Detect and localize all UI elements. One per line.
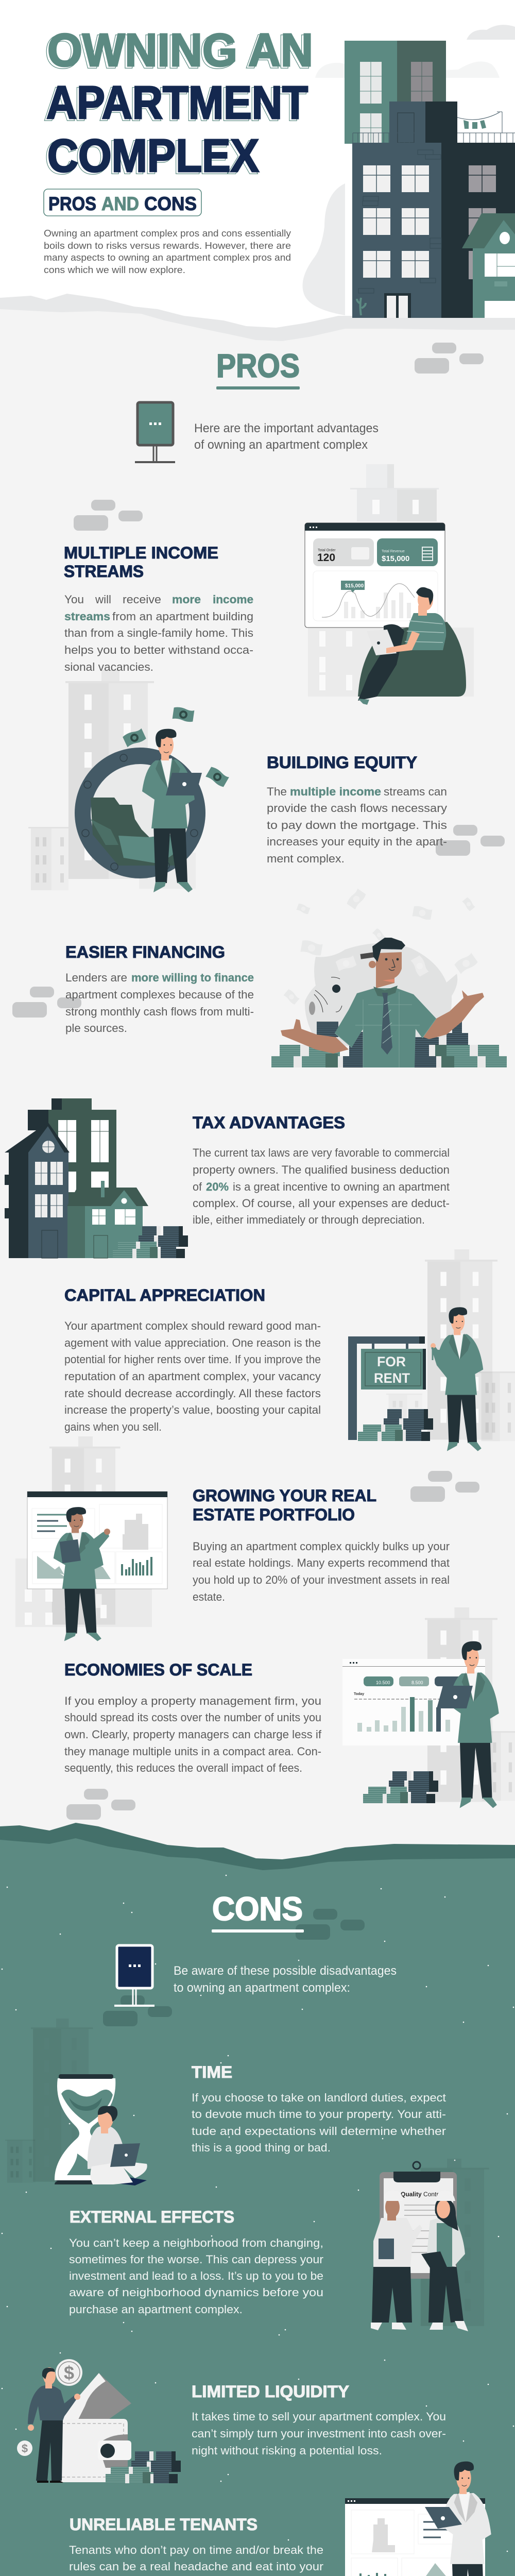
subtitle badge: pros and cons: CONS [144, 193, 197, 214]
con 3 text [192, 2410, 446, 2457]
pro 5 text: rate should decrease accordingly. All these factors [64, 1387, 321, 1400]
cons intro text [174, 1964, 397, 1995]
illustration: man and vault with cash [28, 670, 230, 892]
pro 3 text [65, 971, 254, 1035]
pro 2 text: ment complex. [267, 852, 345, 865]
pro 5 text: potential for higher rents over time. If you improve the [64, 1353, 321, 1366]
intro text [44, 228, 291, 275]
pro 5 text: increase the property’s value, boosting your capital [64, 1403, 321, 1416]
pros intro text: of owning an apartment complex [194, 438, 368, 452]
illustration: quality control clipboard with two workers: Quality Control [401, 2191, 443, 2198]
title: OWNING AN [47, 25, 313, 76]
illustration: man with analytics dashboard: Today [354, 1692, 364, 1696]
hero illustration: apartment buildings [345, 41, 515, 318]
cons intro text: Be aware of these possible disadvantages [174, 1964, 397, 1978]
pro 3 text: strong monthly cash flows from multi- [65, 1005, 254, 1018]
decorative bricks [12, 987, 81, 1018]
decorative bricks [296, 1909, 365, 1940]
illustration: man with wallet, card, coins and cash [17, 2359, 181, 2483]
icon: sign board [114, 1945, 154, 2007]
heading: pros: PROS [216, 347, 300, 384]
pros intro text: Here are the important advantages [194, 421, 379, 435]
subtitle badge: pros and cons: PROS [48, 193, 96, 214]
pro 1 text: helps you to better withstand occa- [64, 643, 253, 656]
heading: cons: CONS [212, 1890, 303, 1927]
decorative bricks [103, 1995, 172, 2026]
subtitle badge: pros and cons: AND [101, 193, 139, 214]
pro 6 text: estate. [193, 1590, 225, 1603]
pro 1 text: You [64, 593, 84, 606]
pros intro text [194, 421, 379, 452]
illustration: for rent sign and man with keys: FOR [377, 1354, 406, 1369]
con 3 heading: limited liquidity: LIMITED LIQUIDITY [192, 2382, 349, 2401]
pro 6 text: real estate holdings. Many experts recommend that [193, 1556, 450, 1569]
con 1 text [192, 2091, 446, 2154]
con 1 text: this is a good thing or bad. [192, 2141, 331, 2154]
con 2 text: aware of neighborhood dynamics before you [69, 2286, 323, 2299]
illustration: houses and apartment building with cash [5, 1098, 188, 1258]
decorative bricks [410, 1471, 479, 1502]
pro 1 heading: multiple income streams: MULTIPLE INCOME [64, 544, 218, 562]
illustration: income dashboard and man on beanbag: $15,000 [382, 554, 409, 563]
con 4 text: Tenants who don’t pay on time and/or break the [69, 2544, 323, 2556]
pro 6 text: Buying an apartment complex quickly bulks up your [193, 1540, 450, 1553]
pro 7 text: should spread its costs over the number of units you [64, 1711, 321, 1724]
pro 6 heading: growing your real estate portfolio: GROWING YOUR REAL [193, 1486, 376, 1505]
pro 4 text: The current tax laws are very favorable to commercial [193, 1146, 450, 1159]
pro 7 text: If you employ a property management firm, you [64, 1694, 321, 1707]
decorative bricks [74, 500, 143, 531]
decorative bricks [66, 1789, 135, 1820]
con 1 text: to devote much time to your property. Your atti- [192, 2108, 446, 2121]
illustration: quality control clipboard with two workers [371, 2159, 489, 2331]
pro 1 text: income [213, 593, 253, 606]
decorative bricks top right [415, 343, 484, 374]
pro 6 heading: growing your real estate portfolio [193, 1486, 376, 1524]
pro 5 text: Your apartment complex should reward good man- [64, 1319, 321, 1332]
pro 6 text [193, 1540, 450, 1603]
pro 5 heading: capital appreciation: CAPITAL APPRECIATION [64, 1286, 265, 1304]
title: APARTMENT [44, 79, 306, 130]
pro 4 text [193, 1146, 450, 1226]
con 1 text: If you choose to take on landlord duties, expect [192, 2091, 446, 2104]
con 2 text: purchase an apartment complex. [69, 2303, 243, 2316]
pro 4 text: property owners. The qualified business deduction [193, 1163, 450, 1176]
pro 2 text: to pay down the mortgage. This [267, 819, 447, 832]
pro 6 heading: growing your real estate portfolio: ESTATE PORTFOLIO [193, 1505, 355, 1524]
pro 5 text: gains when you sell. [64, 1420, 162, 1433]
pro 1 text: than from a single-family home. This [64, 626, 253, 639]
pro 5 text: reputation of an apartment complex, your vacancy [64, 1370, 321, 1383]
pro 5 text [64, 1319, 321, 1433]
illustration: man presenting real estate dashboard [15, 1436, 167, 1641]
pro 2 text: multiple income [290, 785, 381, 798]
illustration: income dashboard and man on beanbag: $15,000 [345, 583, 364, 589]
pro 1 text: streams [64, 610, 110, 623]
title: COMPLEX [45, 132, 257, 183]
pro 3 text: ple sources. [65, 1022, 127, 1035]
con 4 text [69, 2544, 323, 2576]
pro 7 text: they manage multiple units in a compact area. Con- [64, 1745, 321, 1758]
pro 4 text: complex. Of course, all your expenses are deduct- [193, 1197, 450, 1210]
illustration: man with analytics dashboard: 8.500 [411, 1680, 423, 1685]
pro 5 text: agement with value appreciation. One reason is the [64, 1336, 321, 1349]
pro 4 text: ible, either immediately or through depreciation. [193, 1213, 425, 1226]
illustration: man with piggy bank and cash [271, 888, 507, 1067]
con 3 text: can’t simply turn your investment into cash over- [192, 2427, 446, 2440]
hero background: white area with grey wave [0, 0, 515, 341]
pro 1 text: receive [123, 593, 161, 606]
pro 1 heading: multiple income streams: STREAMS [64, 562, 144, 581]
illustration: income dashboard and man on beanbag [305, 523, 466, 705]
illustration: for rent sign and man with keys [348, 1249, 515, 1451]
cons section background with wave [0, 1823, 515, 2576]
con 3 text: night without risking a potential loss. [192, 2444, 382, 2457]
title [44, 25, 313, 183]
pro 4 text: is a great incentive to owning an apartment [233, 1180, 450, 1193]
pro 2 text: The [267, 785, 287, 798]
pro 3 text: Lenders are [65, 971, 127, 984]
pro 1 text: sional vacancies. [64, 660, 153, 673]
pro 7 text: own. Clearly, property managers can charge less if [64, 1728, 322, 1741]
pro 2 text [267, 785, 447, 865]
pro 7 text [64, 1694, 322, 1774]
pro 1 text: will [95, 593, 111, 606]
pro 3 text: apartment complexes because of the [65, 988, 254, 1001]
pro 2 heading: building equity: BUILDING EQUITY [267, 753, 417, 772]
con 2 text: sometimes for the worse. This can depress your [69, 2253, 323, 2266]
con 4 text: rules can be a real headache and eat into your [69, 2560, 323, 2573]
illustration: man with wallet, card, coins and cash: $ [22, 2442, 28, 2455]
title: OWNING AN [45, 26, 311, 78]
cons intro text: to owning an apartment complex: [174, 1981, 350, 1995]
pro 4 text: 20% [206, 1180, 229, 1193]
title: OWNING AN [45, 26, 311, 78]
pro 2 text: increases your equity in the apart- [267, 835, 447, 848]
pro 2 text: streams can [384, 785, 447, 798]
pro 1 heading: multiple income streams [64, 544, 218, 581]
pro 2 text: provide the cash flows necessary [267, 802, 447, 815]
subtitle badge: pros and cons [44, 189, 201, 216]
title: APARTMENT [44, 79, 306, 130]
illustration: man with analytics dashboard: 10.500 [376, 1680, 390, 1685]
intro text: cons which we will now explore. [44, 265, 185, 275]
con 2 text: investment and lead to a loss. It’s up to you to be [69, 2269, 323, 2282]
title: APARTMENT [46, 77, 308, 129]
illustration: income dashboard and man on beanbag: 120 [317, 552, 335, 564]
pro 4 heading: tax advantages: TAX ADVANTAGES [193, 1113, 345, 1132]
intro text: boils down to risks versus rewards. However, there are [44, 241, 291, 251]
illustration: for rent sign and man with keys: RENT [374, 1370, 410, 1386]
con 2 heading: external effects: EXTERNAL EFFECTS [70, 2208, 234, 2226]
intro text: Owning an apartment complex pros and cons essentially [44, 228, 291, 239]
con 1 text: tude and expectations will determine whether [192, 2125, 446, 2138]
illustration: income dashboard and man on beanbag: Total Order [318, 549, 336, 552]
con 4 heading: unreliable tenants: UNRELIABLE TENANTS [70, 2515, 258, 2534]
pro 3 text: more willing to finance [131, 971, 254, 984]
pro 1 text [64, 593, 253, 673]
pro 4 text: of [193, 1180, 202, 1193]
illustration: man with laptop and reporting dashboard [336, 2462, 491, 2576]
con 3 text: It takes time to sell your apartment complex. You [192, 2410, 446, 2423]
con 2 text: You can’t keep a neighborhood from changing, [69, 2236, 323, 2249]
pro 6 text: you hold up to 20% of your investment assets in real [193, 1573, 450, 1586]
icon: sign board [135, 402, 175, 463]
illustration: man with analytics dashboard [342, 1607, 515, 1808]
pro 1 text: more [172, 593, 201, 606]
con 2 text [69, 2236, 323, 2316]
pro 7 heading: economies of scale: ECONOMIES OF SCALE [64, 1660, 252, 1679]
con 1 heading: time: TIME [192, 2063, 232, 2081]
pro 3 heading: easier financing: EASIER FINANCING [65, 943, 225, 961]
title: COMPLEX [47, 130, 259, 182]
pro 1 text: from an apartment building [112, 610, 253, 623]
pro 7 text: sequently, this reduces the overall impact of fees. [64, 1761, 302, 1774]
illustration: man sitting by hourglass [5, 2019, 147, 2185]
illustration: man with wallet, card, coins and cash: $ [64, 2362, 74, 2383]
decorative bricks [436, 825, 505, 856]
intro text: many aspects to owning an apartment complex pros and [44, 252, 291, 263]
background: faint buildings behind dashboard [308, 464, 474, 697]
title: COMPLEX [45, 132, 257, 183]
illustration: income dashboard and man on beanbag: Total Revenue [382, 550, 405, 553]
